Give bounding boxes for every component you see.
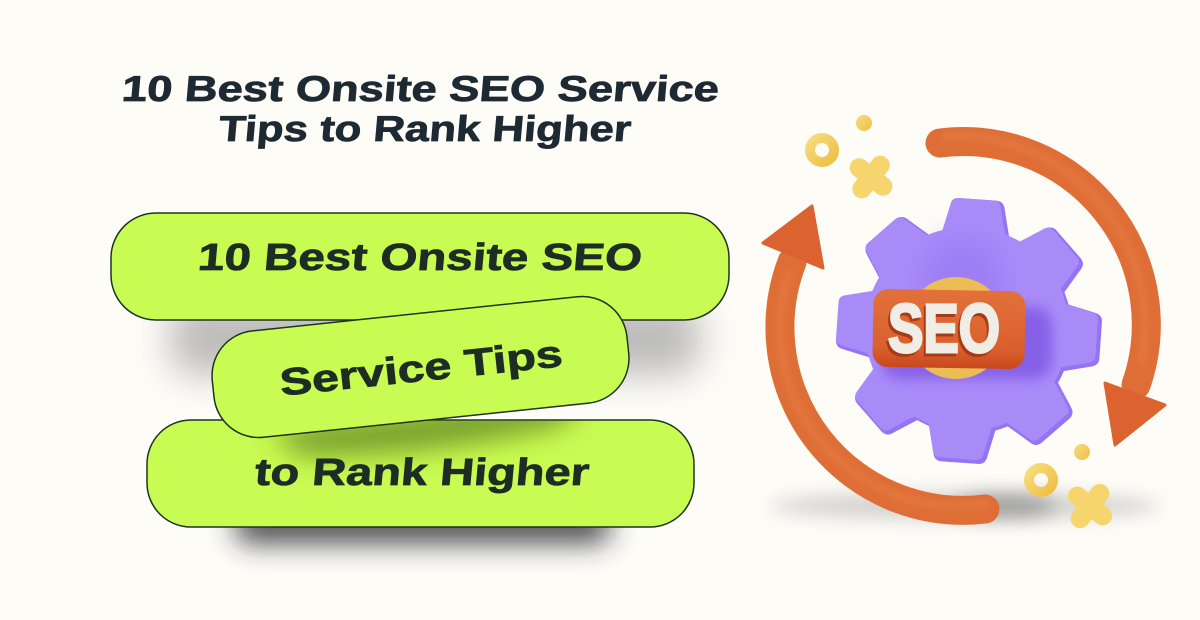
title: Tips to Rank Higher: [217, 108, 633, 149]
infographic canvas: [110, 74, 1166, 566]
pill: to Rank Higher: [146, 419, 695, 528]
icon: bottom ring: [1029, 468, 1053, 492]
title: 10 Best Onsite SEO Service: [120, 68, 721, 109]
ground shadow: [770, 493, 1160, 519]
arrow: clockwise top right: [940, 136, 1165, 445]
pill shadows: [170, 300, 700, 543]
SEO badge: SEO: [888, 290, 1000, 367]
title: [120, 68, 721, 149]
pill: 10 Best Onsite SEO: 10 Best Onsite SEO: [196, 237, 644, 279]
pill: Service Tips: [208, 292, 633, 442]
arrow: clockwise bottom left: [763, 206, 985, 510]
pill: 10 Best Onsite SEO: [111, 213, 729, 320]
SEO badge: SEO: [886, 293, 998, 370]
icon: purple gear: [830, 192, 1107, 469]
icon: gold hub: [905, 277, 1007, 379]
icon: bottom cross: [1068, 484, 1112, 528]
icon: top ring: [810, 138, 834, 162]
icon: top dot: [856, 115, 872, 131]
icon: top cross: [850, 156, 892, 198]
pill: to Rank Higher: to Rank Higher: [253, 452, 591, 494]
icon: bottom dot: [1074, 444, 1090, 460]
pill: Service Tips: Service Tips: [278, 333, 565, 405]
